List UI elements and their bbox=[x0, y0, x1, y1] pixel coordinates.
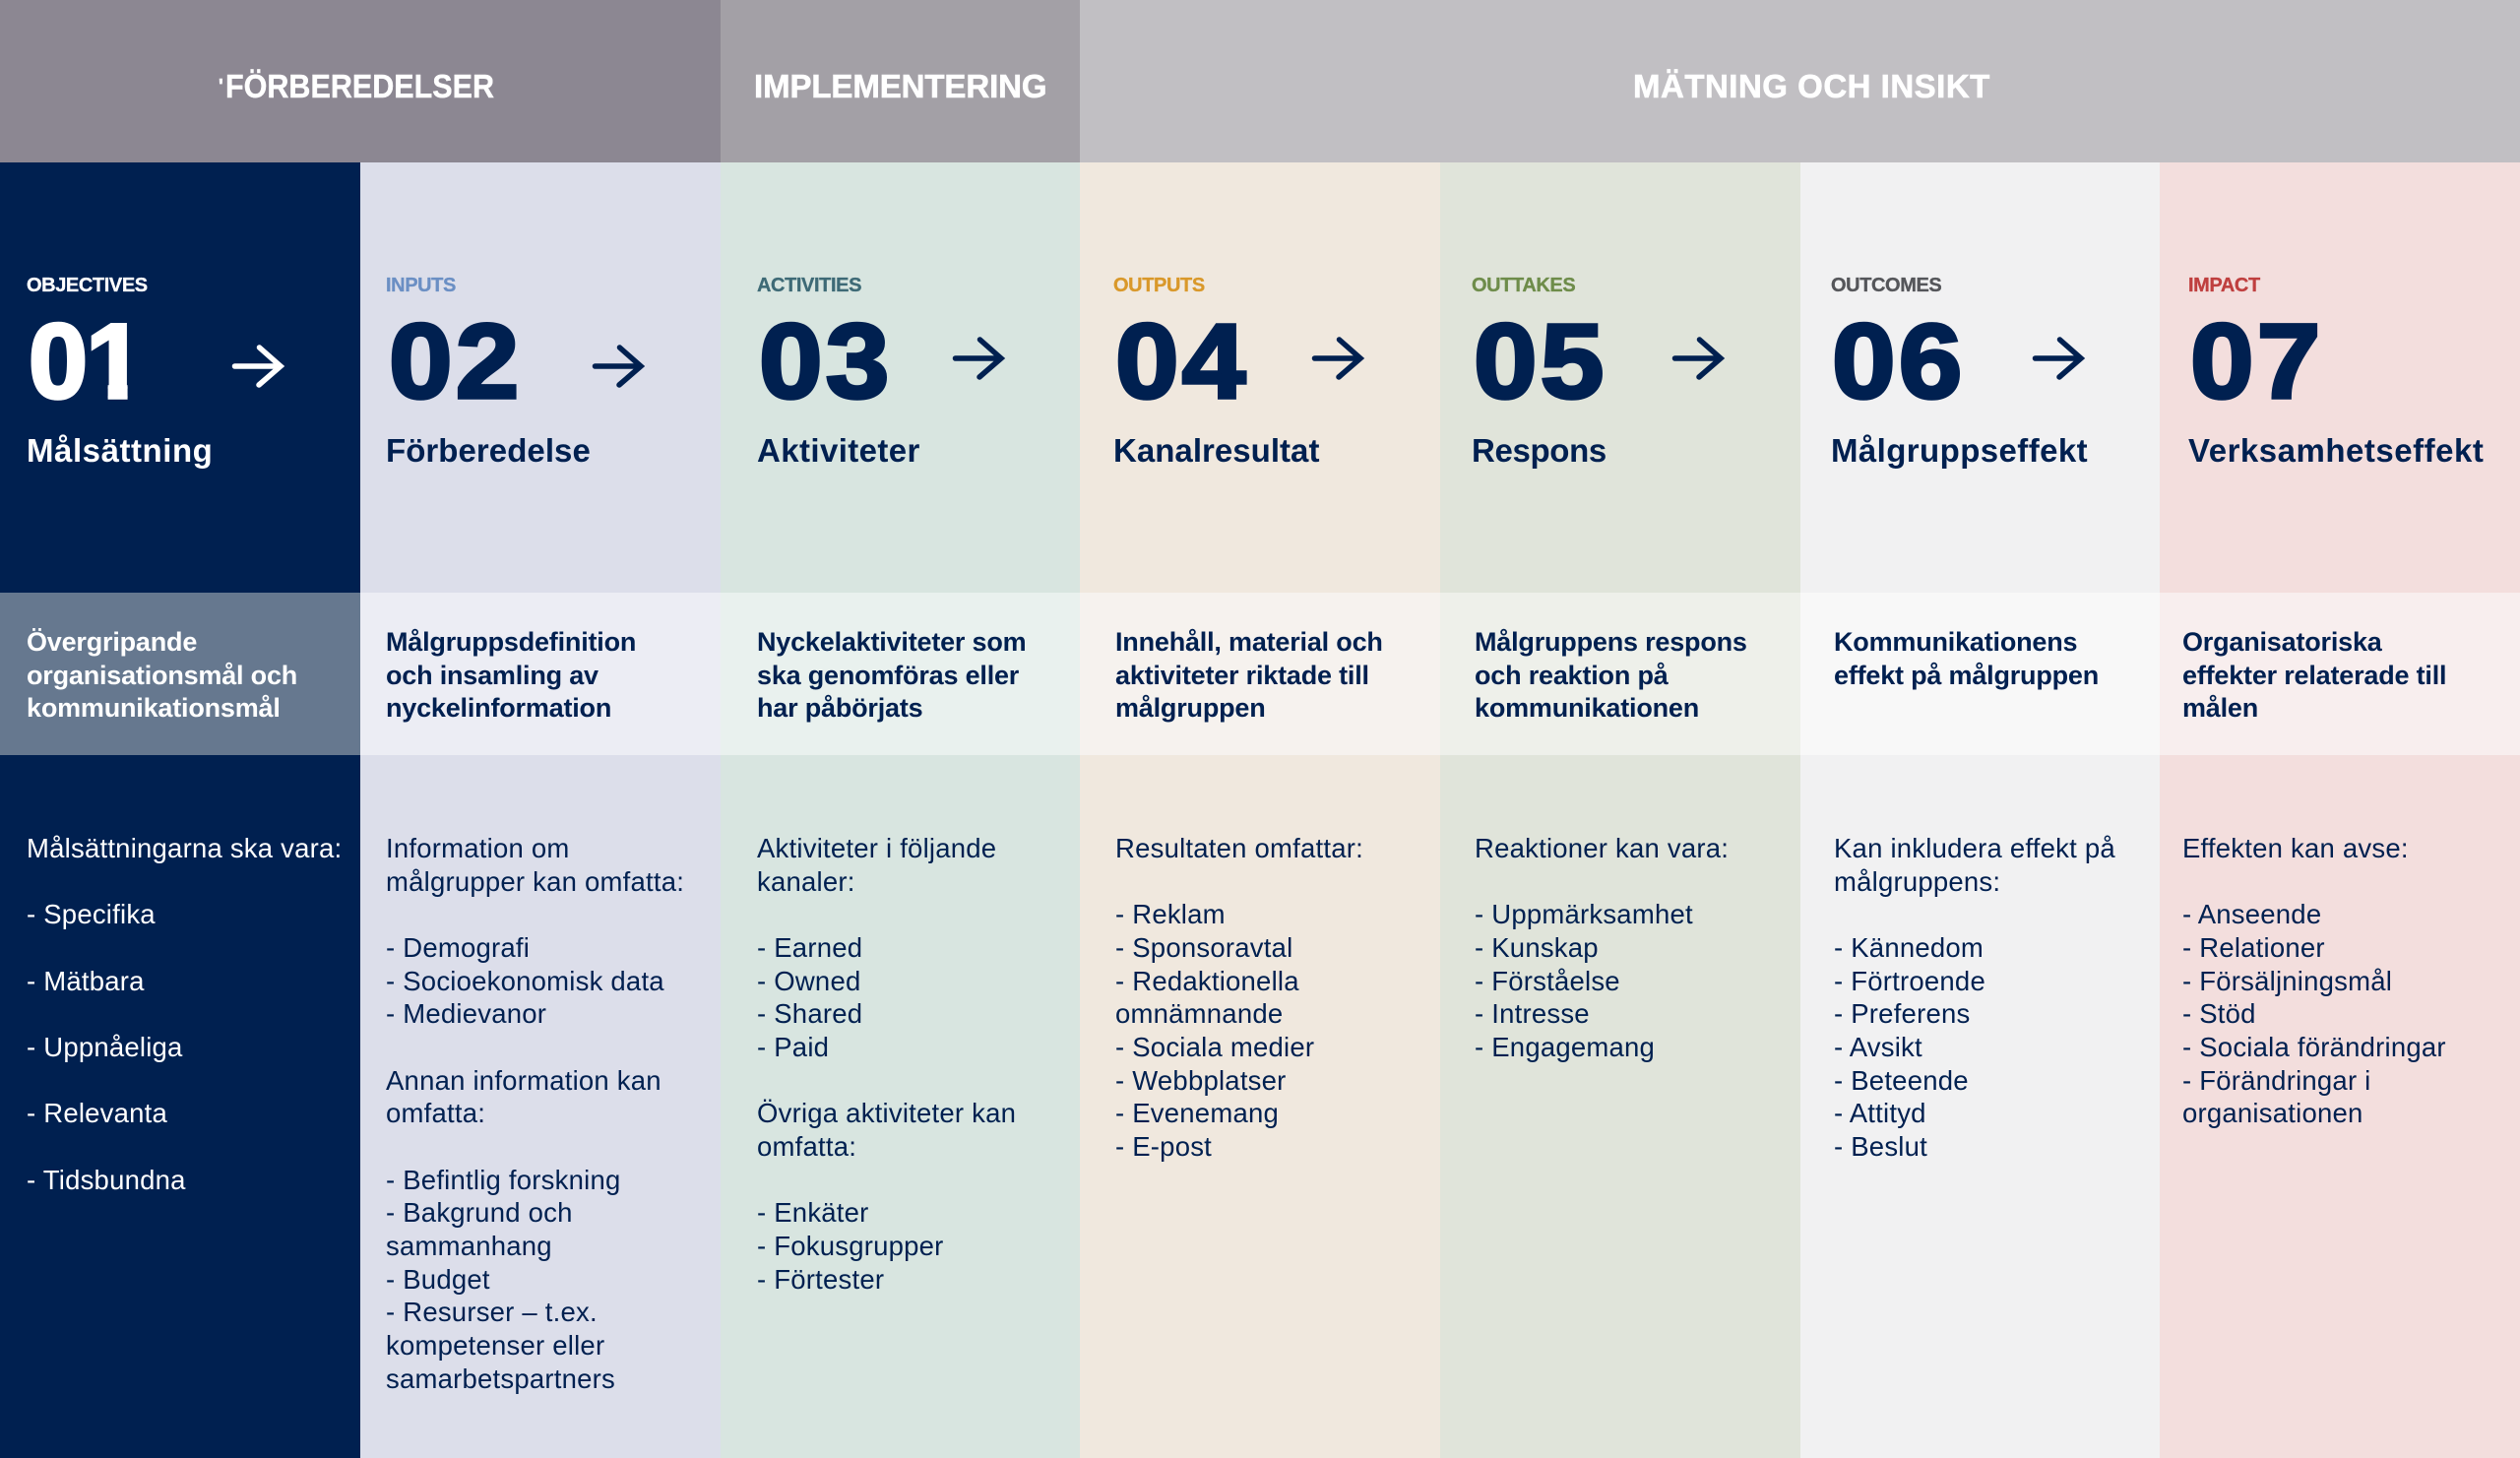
header: FÖRBEREDELSER: FÖRBEREDELSER bbox=[225, 68, 494, 104]
body: 05: - Engagemang bbox=[1475, 1032, 1655, 1062]
summary: 04: Innehåll, material och bbox=[1115, 627, 1383, 657]
band: 07 bbox=[2160, 593, 2520, 755]
body: 02: omfatta: bbox=[386, 1098, 485, 1128]
body: 06: - Förtroende bbox=[1834, 966, 1985, 996]
summary: 04: målgruppen bbox=[1115, 693, 1266, 723]
band: 02 bbox=[360, 593, 721, 755]
body: 06: - Kännedom bbox=[1834, 932, 1984, 963]
panel: 07 impact bbox=[2160, 162, 2520, 1458]
body: 05 bbox=[1475, 833, 1729, 1062]
body: 04: - E-post bbox=[1115, 1131, 1212, 1162]
body: 03: - Owned bbox=[757, 966, 860, 996]
title: Förberedelse: Förberedelse bbox=[386, 432, 591, 469]
body: 05: - Kunskap bbox=[1475, 932, 1599, 963]
summary: 05: kommunikationen bbox=[1475, 693, 1699, 723]
body: 06: - Preferens bbox=[1834, 998, 1970, 1029]
kicker: ACTIVITIES: ACTIVITIES bbox=[757, 274, 861, 295]
body: 01: - Mätbara bbox=[27, 966, 145, 996]
body: 03: - Shared bbox=[757, 998, 862, 1029]
summary: 03 bbox=[757, 627, 1026, 723]
number: 07: 07 bbox=[2190, 301, 2324, 420]
header: IMPLEMENTERING: IMPLEMENTERING bbox=[754, 68, 1046, 104]
title: Målsättning: Målsättning bbox=[27, 432, 213, 469]
body: 06: - Avsikt bbox=[1834, 1032, 1922, 1062]
summary: 02: Målgruppsdefinition bbox=[386, 627, 636, 657]
panel: 06 outcomes bbox=[1800, 162, 2160, 1458]
panel: 04 outputs bbox=[1080, 162, 1440, 1458]
body: 03: - Fokusgrupper bbox=[757, 1231, 944, 1261]
body: 02: målgrupper kan omfatta: bbox=[386, 866, 684, 897]
body: 05: - Förståelse bbox=[1475, 966, 1620, 996]
body: 02: Information om bbox=[386, 833, 569, 863]
body: 05: Reaktioner kan vara: bbox=[1475, 833, 1729, 863]
body: 03: - Förtester bbox=[757, 1264, 884, 1295]
body: 02: - Medievanor bbox=[386, 998, 546, 1029]
body: 04: - Sociala medier bbox=[1115, 1032, 1314, 1062]
body: 04: - Sponsoravtal bbox=[1115, 932, 1292, 963]
summary: 06: Kommunikationens bbox=[1834, 627, 2077, 657]
icon: arrow 5 bbox=[1671, 337, 1725, 380]
body: 06: - Beslut bbox=[1834, 1131, 1927, 1162]
summary: 06 bbox=[1834, 627, 2099, 690]
band: 06 bbox=[1800, 593, 2160, 755]
body: 06: - Beteende bbox=[1834, 1065, 1969, 1096]
kicker: OUTCOMES: OUTCOMES bbox=[1831, 274, 1941, 295]
body: 06: - Attityd bbox=[1834, 1098, 1926, 1128]
summary: 03: har påbörjats bbox=[757, 693, 922, 723]
title: Aktiviteter: Aktiviteter bbox=[757, 432, 920, 469]
summary: 07 bbox=[2182, 627, 2446, 723]
band: 04 bbox=[1080, 593, 1440, 755]
number: 06: 06 bbox=[1832, 301, 1966, 420]
summary: 02: och insamling av bbox=[386, 661, 598, 690]
header: FÖRBEREDELSER bbox=[0, 0, 721, 162]
summary: 05 bbox=[1475, 627, 1747, 723]
body: 06 bbox=[1834, 833, 2115, 1162]
title: Målgruppseffekt: Målgruppseffekt bbox=[1831, 432, 2088, 469]
summary: 05: och reaktion på bbox=[1475, 661, 1669, 690]
header: MÄTNING OCH INSIKT bbox=[1080, 0, 2520, 162]
header: FÖRBEREDELSER: ' bbox=[219, 76, 223, 97]
body: 02: - Budget bbox=[386, 1264, 490, 1295]
body: 03 bbox=[757, 833, 1016, 1295]
body: 02 bbox=[386, 833, 684, 1394]
body: 02: Annan information kan bbox=[386, 1065, 662, 1096]
body: 03: Övriga aktiviteter kan bbox=[757, 1098, 1016, 1128]
kicker: OUTPUTS: OUTPUTS bbox=[1113, 274, 1205, 295]
summary: 03: ska genomföras eller bbox=[757, 661, 1019, 690]
body: 07: - Anseende bbox=[2182, 899, 2321, 929]
title: Verksamhetseffekt: Verksamhetseffekt bbox=[2188, 432, 2484, 469]
summary: 04: aktiviteter riktade till bbox=[1115, 661, 1369, 690]
body: 01 bbox=[27, 833, 342, 1195]
summary: 04 bbox=[1115, 627, 1383, 723]
body: 07 bbox=[2182, 833, 2446, 1128]
icon: arrow 2 bbox=[593, 345, 646, 388]
body: 02: - Demografi bbox=[386, 932, 530, 963]
summary: 05: Målgruppens respons bbox=[1475, 627, 1747, 657]
band: 01 bbox=[0, 593, 360, 755]
body: 04: - Evenemang bbox=[1115, 1098, 1279, 1128]
body: 07: organisationen bbox=[2182, 1098, 2362, 1128]
number: 01: 0 bbox=[29, 301, 86, 420]
body: 04: Resultaten omfattar: bbox=[1115, 833, 1363, 863]
body: 04: - Reklam bbox=[1115, 899, 1226, 929]
body: 02: - Befintlig forskning bbox=[386, 1165, 620, 1195]
body: 02: - Bakgrund och bbox=[386, 1197, 573, 1228]
body: 04: - Redaktionella bbox=[1115, 966, 1299, 996]
body: 02: samarbetspartners bbox=[386, 1363, 615, 1394]
summary: 01 bbox=[27, 627, 297, 723]
number: 05: 05 bbox=[1474, 301, 1607, 420]
icon: arrow 6 bbox=[2032, 337, 2085, 380]
panel: 02 inputs bbox=[360, 162, 721, 1458]
icon: arrow 1 bbox=[232, 345, 285, 388]
body: 02: - Socioekonomisk data bbox=[386, 966, 664, 996]
title: Respons: Respons bbox=[1472, 432, 1606, 469]
number: 01 bbox=[29, 301, 128, 420]
body: 04 bbox=[1115, 833, 1363, 1162]
number: 04: 04 bbox=[1115, 301, 1249, 420]
band: 05 bbox=[1440, 593, 1800, 755]
band: 03 bbox=[721, 593, 1080, 755]
body: 03: - Enkäter bbox=[757, 1197, 869, 1228]
summary: 07: effekter relaterade till bbox=[2182, 661, 2446, 690]
body: 01: - Uppnåeliga bbox=[27, 1032, 183, 1062]
icon: arrow 4 bbox=[1311, 337, 1364, 380]
body: 03: Aktiviteter i följande bbox=[757, 833, 996, 863]
summary: 07: målen bbox=[2182, 693, 2258, 723]
panel: 03 activities bbox=[721, 162, 1080, 1458]
body: 05: - Uppmärksamhet bbox=[1475, 899, 1693, 929]
body: 01: - Specifika bbox=[27, 899, 156, 929]
summary: 03: Nyckelaktiviteter som bbox=[757, 627, 1026, 657]
body: 04: - Webbplatser bbox=[1115, 1065, 1287, 1096]
kicker: INPUTS: INPUTS bbox=[386, 274, 456, 295]
body: 04: omnämnande bbox=[1115, 998, 1283, 1029]
title: Kanalresultat: Kanalresultat bbox=[1113, 432, 1319, 469]
summary: 07: Organisatoriska bbox=[2182, 627, 2382, 657]
body: 06: målgruppens: bbox=[1834, 866, 2000, 897]
icon: arrow 3 bbox=[953, 337, 1006, 380]
body: 02: sammanhang bbox=[386, 1231, 552, 1261]
body: 03: - Earned bbox=[757, 932, 862, 963]
body: 01: - Tidsbundna bbox=[27, 1165, 186, 1195]
body: 06: Kan inkludera effekt på bbox=[1834, 833, 2115, 863]
body: 03: omfatta: bbox=[757, 1131, 856, 1162]
summary: 02 bbox=[386, 627, 636, 723]
number: 03: 03 bbox=[759, 301, 893, 420]
body: 05: - Intresse bbox=[1475, 998, 1590, 1029]
body: 07: - Försäljningsmål bbox=[2182, 966, 2392, 996]
body: 07: Effekten kan avse: bbox=[2182, 833, 2409, 863]
body: 07: - Sociala förändringar bbox=[2182, 1032, 2446, 1062]
kicker: OBJECTIVES: OBJECTIVES bbox=[27, 274, 148, 295]
body: 02: kompetenser eller bbox=[386, 1330, 604, 1361]
summary: 06: effekt på målgruppen bbox=[1834, 661, 2099, 690]
summary: 01: Övergripande bbox=[27, 627, 197, 657]
number: 01: 1 bbox=[86, 301, 143, 420]
header: MÄTNING OCH INSIKT: MÄTNING OCH INSIKT bbox=[1633, 68, 1990, 104]
kicker: OUTTAKES: OUTTAKES bbox=[1472, 274, 1575, 295]
summary: 02: nyckelinformation bbox=[386, 693, 611, 723]
summary: 01: kommunikationsmål bbox=[27, 693, 281, 723]
header: IMPLEMENTERING bbox=[721, 0, 1080, 162]
body: 07: - Stöd bbox=[2182, 998, 2256, 1029]
summary: 01: organisationsmål och bbox=[27, 661, 297, 690]
body: 03: kanaler: bbox=[757, 866, 855, 897]
kicker: IMPACT: IMPACT bbox=[2188, 274, 2260, 295]
panel: 01 objectives bbox=[0, 162, 360, 1458]
body: 01: - Relevanta bbox=[27, 1098, 167, 1128]
body: 01: Målsättningarna ska vara: bbox=[27, 833, 342, 863]
body: 02: - Resurser – t.ex. bbox=[386, 1297, 598, 1327]
body: 07: - Relationer bbox=[2182, 932, 2325, 963]
body: 07: - Förändringar i bbox=[2182, 1065, 2371, 1096]
panel: 05 outtakes bbox=[1440, 162, 1800, 1458]
number: 02: 02 bbox=[389, 301, 523, 420]
body: 03: - Paid bbox=[757, 1032, 829, 1062]
